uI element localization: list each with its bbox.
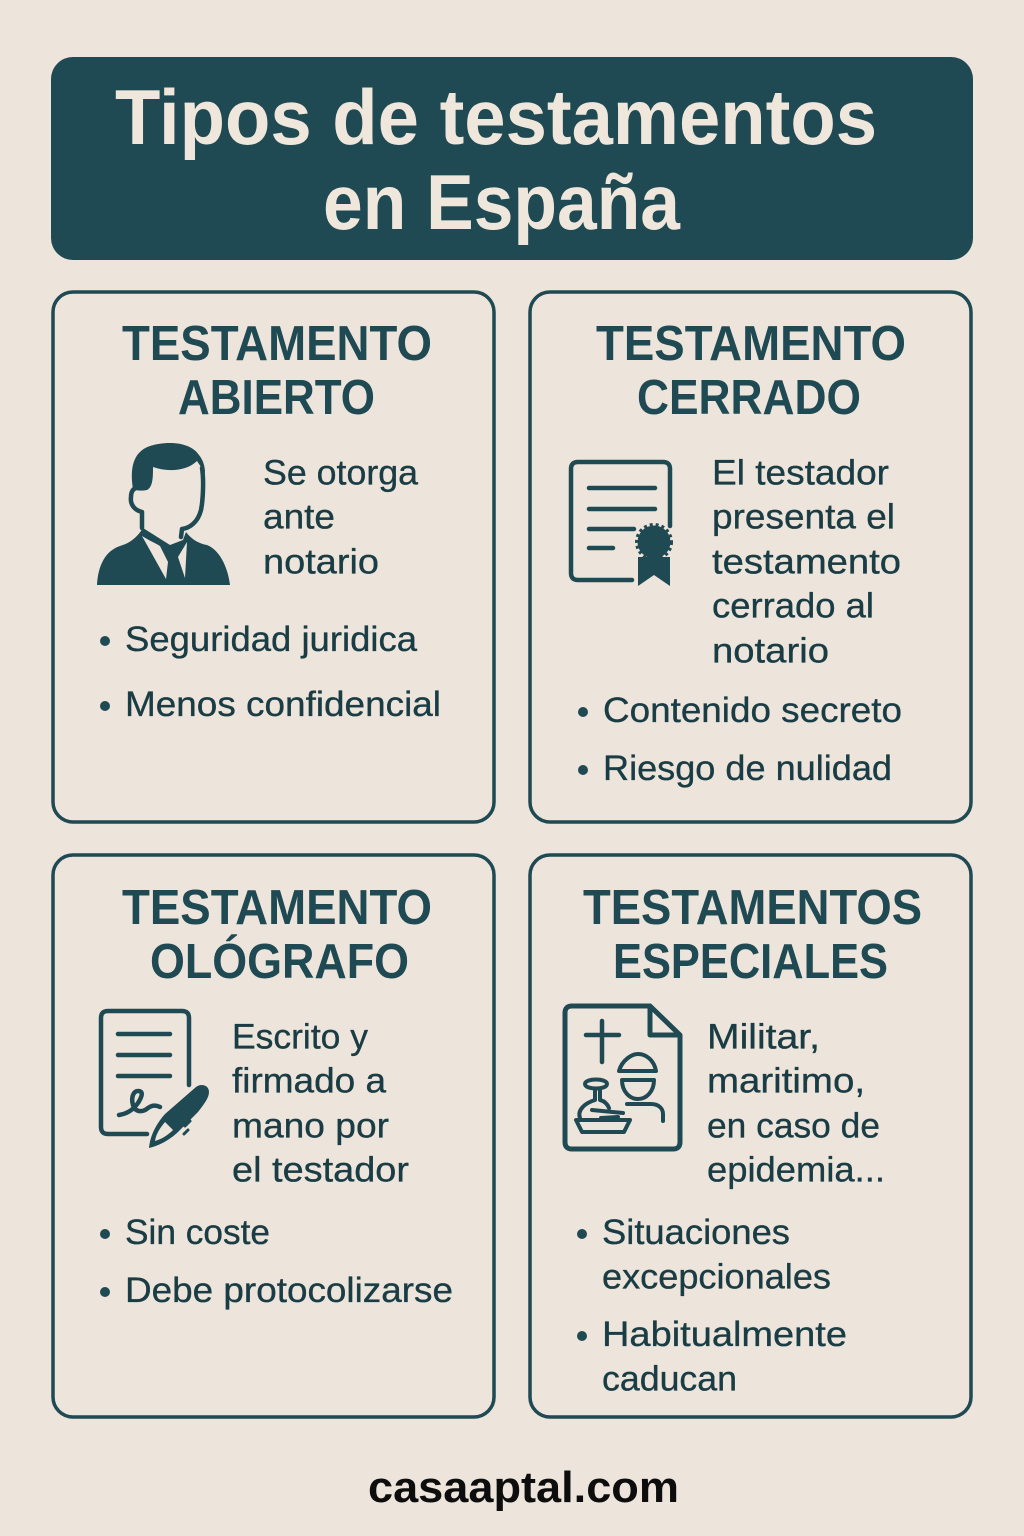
heading: testamento ológrafo [122,881,432,989]
panel: testamento abierto [53,292,494,822]
bullet list: Situaciones [602,1213,790,1252]
heading: testamentos especiales: TESTAMENTOS [583,881,922,935]
text: description: testamento [712,542,901,582]
text: description: Escrito y [232,1018,368,1056]
text: description: firmado a [232,1062,387,1100]
text: description [232,1018,409,1190]
text: description [712,454,901,670]
heading: testamento cerrado [596,317,906,425]
bullet list: Habitualmente [602,1315,847,1354]
text: description: ante [263,498,335,536]
text: description: mano por [232,1106,389,1146]
heading: testamento abierto: ABIERTO [178,371,375,425]
bullet list: caducan [602,1360,737,1398]
bullet list [100,1213,453,1310]
text: description: epidemia... [707,1150,885,1190]
bullet list: Riesgo de nulidad [603,749,892,788]
text: description: El testador [712,454,889,492]
text: description: Se otorga [263,454,419,492]
bullet list [100,620,441,724]
icon: handwritten document and pen [101,1011,209,1148]
panel: testamentos especiales [530,855,971,1417]
bullet list: Debe protocolizarse [125,1271,453,1310]
panel: testamento cerrado [530,292,971,822]
text: description: el testador [232,1150,409,1190]
heading: testamento ológrafo: TESTAMENTO [122,881,432,935]
title banner [51,57,973,260]
text: description: maritimo, [707,1062,865,1100]
text: description: presenta el [712,498,895,536]
heading: testamento ológrafo: OLÓGRAFO [150,934,409,989]
icon: man in suit [97,443,230,585]
icon: document with cross, soldier and ship [565,1006,680,1149]
text: description: notario [712,632,829,670]
bullet list: Contenido secreto [603,691,902,730]
footer: website: casaaptal.com [368,1463,679,1512]
bullet list [577,1213,847,1398]
text: description: cerrado al [712,586,874,626]
heading: testamentos especiales: ESPECIALES [613,935,888,989]
bullet list [578,691,902,788]
panel: testamento ológrafo [53,855,494,1417]
bullet list: Menos confidencial [125,685,441,724]
heading: testamento abierto [122,317,432,425]
text: description [707,1018,885,1190]
text: description [263,454,419,582]
bullet list: Sin coste [125,1213,270,1252]
icon: certificate document [571,462,672,586]
bullet list: excepcionales [602,1258,831,1296]
heading: testamento abierto: TESTAMENTO [122,317,432,371]
text: description: notario [263,542,379,582]
text: description: en caso de [707,1106,880,1146]
heading: testamentos especiales [583,881,922,989]
heading: testamento cerrado: CERRADO [637,371,861,425]
title banner: Tipos de testamentos [115,73,877,161]
heading: testamento cerrado: TESTAMENTO [596,317,906,371]
bullet list: Seguridad juridica [125,620,418,659]
title banner: en España [323,158,681,246]
text: description: Militar, [707,1018,820,1056]
